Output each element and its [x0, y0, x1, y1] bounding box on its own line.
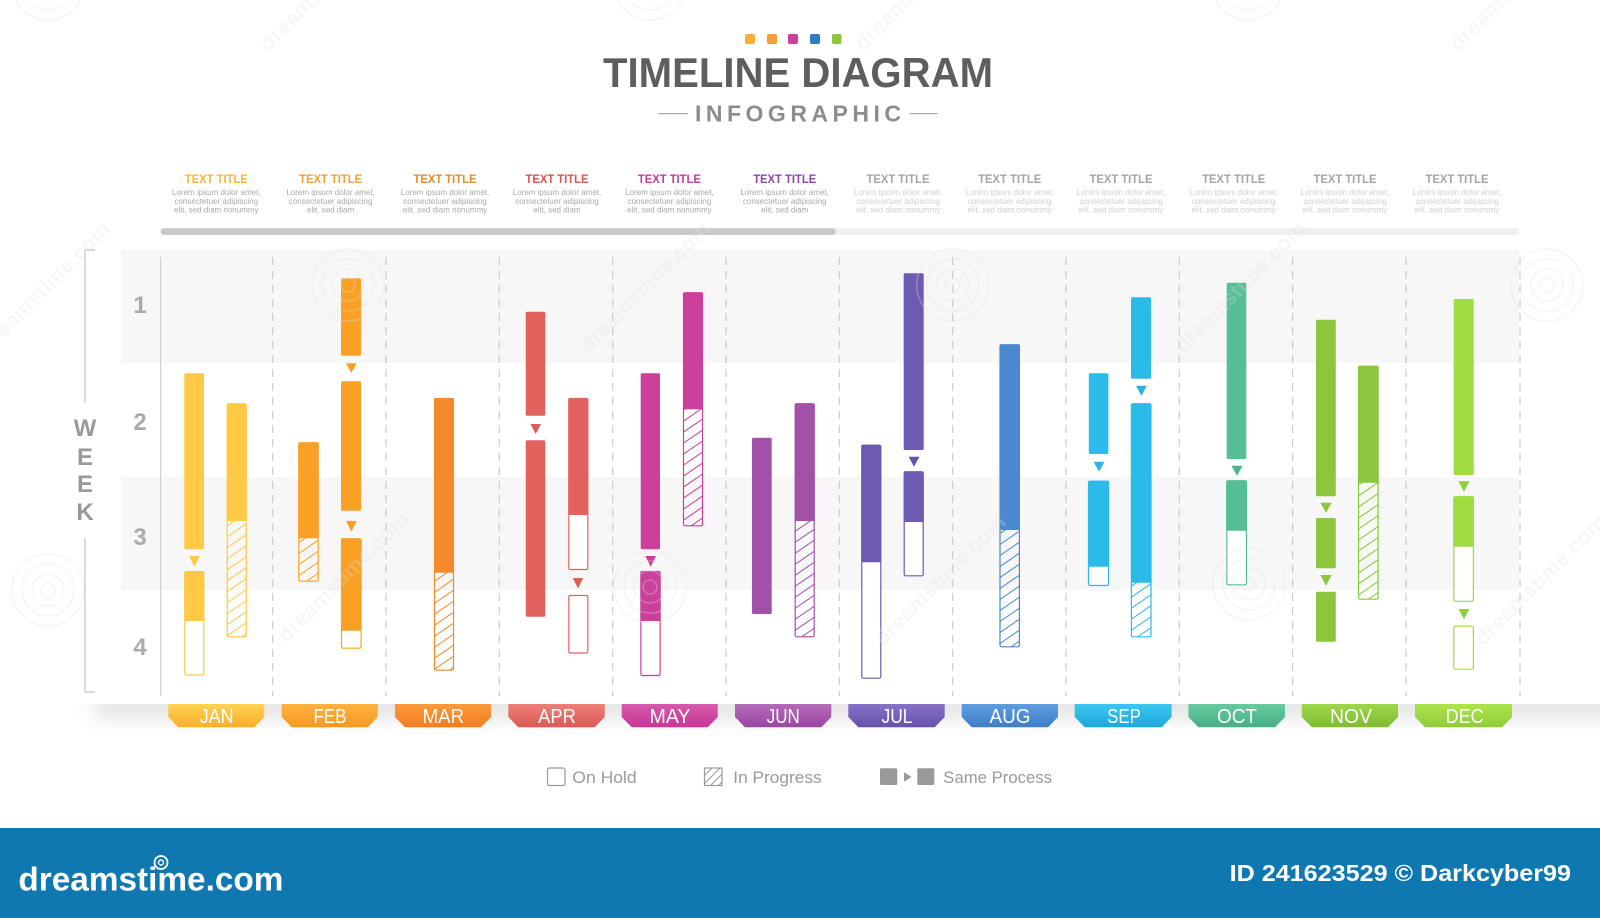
footer bar	[0, 828, 1600, 918]
tab: AUG: AUG	[990, 706, 1030, 728]
text block: February: elit, sed diam	[307, 206, 354, 214]
text block: January: consectetuer adipiscing	[174, 197, 258, 206]
tab: JUL: JUL	[882, 706, 912, 728]
tab: FEB	[282, 704, 378, 728]
text block: May: Lorem ipsum dolor amet,	[625, 188, 714, 197]
text block: April: elit, sed diam	[533, 206, 581, 214]
panel shadow	[95, 696, 1600, 716]
tab: NOV: NOV	[1330, 706, 1373, 728]
bars: November	[1316, 320, 1379, 642]
week axis bracket and label: E	[77, 444, 93, 471]
text block: January: TEXT TITLE	[185, 172, 248, 186]
tab: FEB: FEB	[314, 706, 346, 728]
text block: July: TEXT TITLE	[866, 172, 930, 186]
text block: June	[740, 172, 829, 214]
text block: September: elit, sed diam nonummy	[1079, 206, 1163, 214]
text block: February: Lorem ipsum dolor amet,	[286, 188, 375, 197]
week numbers	[133, 292, 147, 661]
text block: September: TEXT TITLE	[1090, 172, 1152, 186]
text: dreamstime.com	[870, 510, 1010, 650]
legend: same process: Same Process	[943, 768, 1052, 787]
text block: August: Lorem ipsum dolor amet,	[965, 188, 1054, 197]
text block: August: consectetuer adipiscing	[968, 197, 1052, 206]
bars: May	[640, 292, 703, 676]
tab: SEP: SEP	[1107, 706, 1141, 728]
text block: July: elit, sed diam nonummy	[856, 206, 940, 214]
legend: on hold	[548, 768, 637, 787]
tab: JAN: JAN	[200, 706, 234, 728]
text block: July: Lorem ipsum dolor amet,	[854, 188, 942, 197]
text: dreamstime.com	[575, 217, 715, 357]
text block: June: consectetuer adipiscing	[743, 197, 827, 206]
bars: February	[298, 278, 362, 648]
bars: March	[434, 398, 454, 670]
text block: December	[1413, 172, 1501, 214]
text block: March: TEXT TITLE	[414, 172, 476, 186]
legend	[548, 768, 1052, 787]
tab: NOV	[1302, 704, 1398, 728]
text block: October: Lorem ipsum dolor amet,	[1189, 188, 1278, 197]
tab: MAY	[622, 704, 718, 728]
text block: November: TEXT TITLE	[1314, 172, 1376, 186]
text block: November	[1301, 172, 1389, 214]
tab: OCT	[1188, 704, 1285, 728]
text block: March: consectetuer adipiscing	[403, 197, 487, 206]
text block: July	[854, 172, 942, 214]
text block: March	[401, 172, 489, 214]
text block: August: TEXT TITLE	[978, 172, 1041, 186]
text block: June: TEXT TITLE	[753, 172, 816, 186]
week axis bracket and label: K	[76, 499, 94, 526]
text block: January: elit, sed diam nonummy	[174, 206, 259, 214]
footer credit: ID 241623529 © Darkcyber99	[1230, 860, 1571, 886]
text: dreamstime.com	[273, 507, 413, 647]
text block: September: Lorem ipsum dolor amet,	[1077, 188, 1165, 197]
text block: October	[1189, 172, 1278, 214]
bars: June	[752, 403, 815, 637]
tab: JAN	[168, 704, 264, 728]
text block: April: TEXT TITLE	[526, 172, 588, 186]
text block: September	[1077, 172, 1165, 214]
tab: MAY: MAY	[650, 706, 690, 728]
header colour dots	[745, 34, 842, 44]
progress bar	[161, 228, 1519, 235]
text block: July: consectetuer adipiscing	[856, 197, 940, 206]
tab: OCT: OCT	[1217, 706, 1257, 728]
text block: November: Lorem ipsum dolor amet,	[1301, 188, 1389, 197]
text block: February	[286, 172, 375, 214]
week numbers: 4	[133, 634, 147, 661]
text block: May: elit, sed diam nonummy	[627, 206, 712, 214]
chart panel background	[0, 240, 1600, 704]
title: TIMELINE DIAGRAM	[603, 49, 993, 96]
tab: DEC	[1415, 704, 1512, 728]
tab: DEC: DEC	[1446, 706, 1484, 728]
text block: March: elit, sed diam nonummy	[403, 206, 487, 214]
text block: May: consectetuer adipiscing	[628, 197, 711, 206]
bars: September	[1088, 297, 1151, 637]
text block: August	[965, 172, 1054, 214]
tab: MAR	[395, 704, 491, 728]
tab: SEP	[1075, 704, 1172, 728]
week axis bracket and label	[74, 250, 97, 692]
bars: April	[526, 312, 588, 653]
text block: January	[172, 172, 261, 214]
text: dreamstime.com	[1170, 217, 1310, 357]
text block: September: consectetuer adipiscing	[1079, 197, 1163, 206]
text block: January: Lorem ipsum dolor amet,	[172, 188, 261, 197]
text block: November: elit, sed diam nonummy	[1303, 206, 1387, 214]
subtitle: INFOGRAPHIC	[695, 101, 901, 127]
text block: June: elit, sed diam	[761, 206, 809, 214]
bars: January	[184, 373, 247, 675]
tab: JUN: JUN	[767, 706, 800, 728]
watermark overlay	[12, 0, 1583, 626]
week axis bracket and label: W	[74, 415, 97, 442]
week axis bracket and label: E	[77, 471, 93, 498]
bars: October	[1226, 283, 1247, 585]
text block: October: consectetuer adipiscing	[1192, 197, 1276, 206]
text block: November: consectetuer adipiscing	[1303, 197, 1387, 206]
text block: April: consectetuer adipiscing	[515, 197, 599, 206]
legend: same process	[880, 768, 1052, 787]
text block: April: Lorem ipsum dolor amet,	[513, 188, 601, 197]
bars: July	[861, 273, 924, 678]
tab: JUL	[848, 704, 945, 728]
text block: December: consectetuer adipiscing	[1415, 197, 1499, 206]
text block: March: Lorem ipsum dolor amet,	[401, 188, 489, 197]
text block: April	[513, 172, 601, 214]
month text titles	[172, 172, 1501, 214]
week numbers: 1	[133, 292, 147, 319]
text block: May	[625, 172, 714, 214]
text block: May: TEXT TITLE	[638, 172, 701, 186]
footer logo: dreamstime.com	[18, 861, 283, 898]
tab: JUN	[735, 704, 831, 728]
legend: in progress: In Progress	[733, 768, 822, 787]
week numbers: 3	[133, 524, 147, 551]
tab: APR: APR	[538, 706, 576, 728]
legend: on hold: On Hold	[572, 768, 637, 787]
text block: August: elit, sed diam nonummy	[967, 206, 1052, 214]
text block: October: elit, sed diam nonummy	[1191, 206, 1276, 214]
month tabs	[168, 704, 1512, 728]
text block: October: TEXT TITLE	[1202, 172, 1265, 186]
bars: December	[1453, 299, 1474, 669]
text block: December: elit, sed diam nonummy	[1415, 206, 1499, 214]
week numbers: 2	[133, 409, 147, 436]
tab: AUG	[962, 704, 1058, 728]
text block: June: Lorem ipsum dolor amet,	[740, 188, 829, 197]
tab: APR	[508, 704, 605, 728]
text block: February: consectetuer adipiscing	[289, 197, 372, 206]
text block: February: TEXT TITLE	[299, 172, 362, 186]
text block: December: TEXT TITLE	[1426, 172, 1488, 186]
bars: August	[1000, 344, 1020, 647]
tab: MAR: MAR	[422, 706, 464, 728]
text block: December: Lorem ipsum dolor amet,	[1413, 188, 1501, 197]
